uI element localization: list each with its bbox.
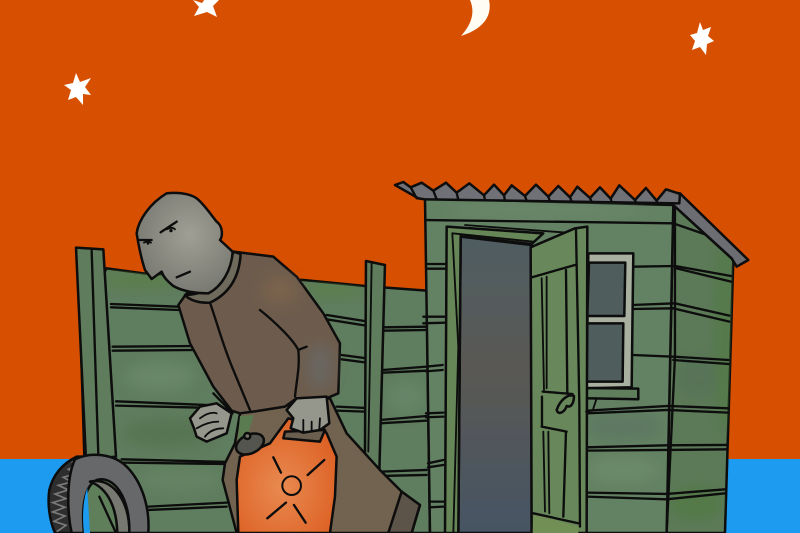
fuel can [233, 418, 337, 533]
crescent moon [461, 0, 490, 36]
tyre [49, 455, 149, 533]
star: right [690, 22, 714, 55]
shed front wall [425, 198, 673, 533]
coat lower [223, 398, 420, 533]
roof side [673, 193, 748, 267]
door opening [458, 237, 532, 533]
fence gap beside coat [237, 415, 254, 443]
fist [190, 403, 232, 442]
can cap [233, 429, 267, 459]
man [49, 193, 420, 533]
open door [531, 227, 597, 533]
shed shading [480, 201, 734, 520]
shed [395, 182, 748, 533]
door latch [557, 395, 574, 413]
shed planks [423, 205, 731, 533]
shed side wall [667, 205, 733, 533]
tyre tread [49, 457, 83, 533]
fence shading [100, 272, 427, 493]
can sun emblem [267, 457, 324, 523]
fence boards [80, 268, 430, 533]
window frame [587, 253, 633, 388]
shed roof [395, 182, 748, 267]
coat upper [178, 252, 340, 413]
fence rails [111, 304, 427, 510]
hand on can [287, 397, 329, 433]
left fence post [76, 248, 116, 460]
blue ground [0, 459, 800, 533]
middle fence post [365, 261, 385, 473]
head [137, 193, 233, 293]
window [583, 253, 638, 399]
star: left [64, 73, 91, 105]
window panes [587, 263, 625, 382]
tyre inner wall [90, 481, 129, 533]
window sill [583, 388, 638, 399]
coat collar [185, 252, 241, 303]
can handle [283, 430, 325, 442]
door frame [445, 225, 567, 533]
tyre hole [83, 479, 129, 533]
door lower step [533, 514, 578, 533]
tyre wall [68, 455, 149, 533]
face [139, 222, 177, 240]
corrugated roof front [395, 182, 680, 203]
trouser leg [388, 492, 420, 533]
star: top centre [193, 0, 219, 17]
sleeve cuff [213, 393, 233, 413]
fence [76, 248, 430, 533]
